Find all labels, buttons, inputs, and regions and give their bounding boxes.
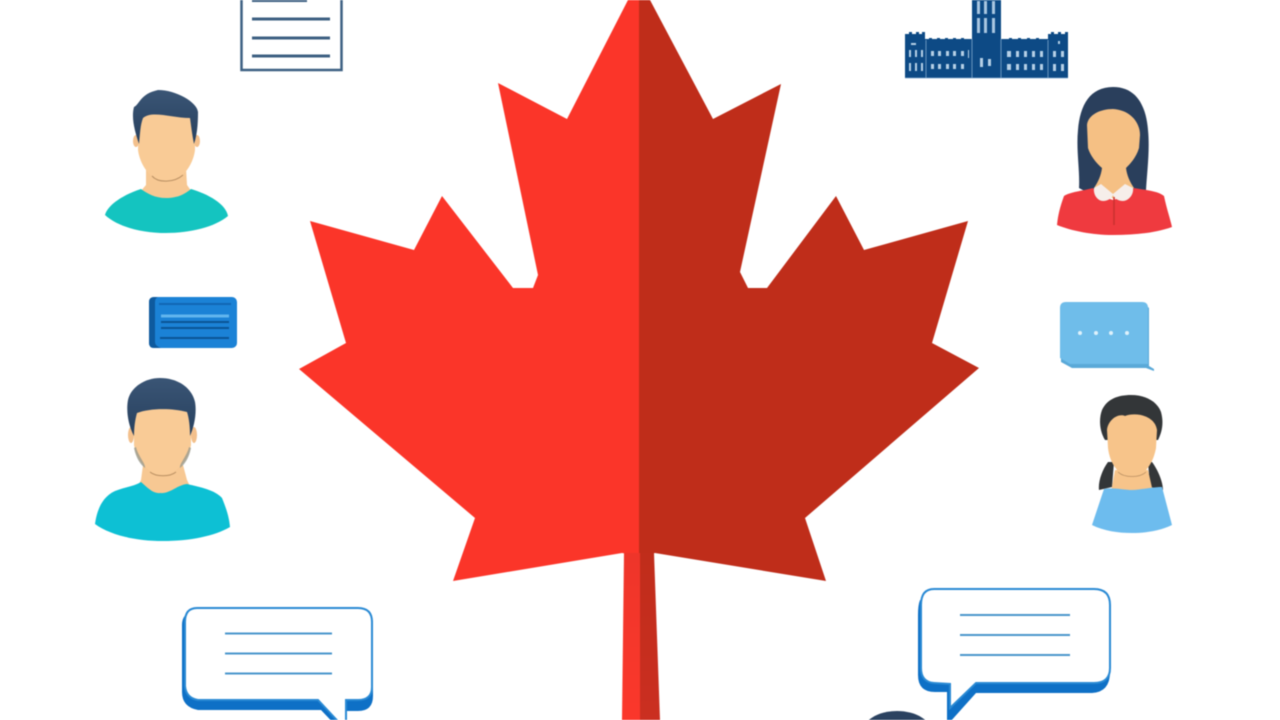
speech bubble: lower right: [918, 589, 1110, 720]
dots: [1078, 331, 1129, 335]
speech bubble: lower left: [182, 608, 373, 720]
leaf right half: [639, 0, 979, 581]
leaf left half: [299, 0, 640, 581]
person: girl with blue shirt: [1092, 395, 1172, 533]
icon: document: [242, 0, 342, 70]
leaf stem left: [622, 553, 640, 720]
person: woman with red shirt: [1057, 87, 1172, 235]
leaf stem right: [640, 553, 660, 720]
tower windows: [977, 1, 995, 33]
icon: blue speech box: [149, 297, 237, 348]
person: man with teal shirt: [105, 90, 228, 233]
wall windows: [909, 41, 1064, 71]
icon: parliament building: [905, 0, 1068, 78]
person: partial head at bottom: [862, 711, 932, 720]
icon: maple leaf: [299, 0, 979, 720]
icon: light blue speech box: [1060, 302, 1154, 371]
person: man with cyan shirt: [95, 378, 230, 541]
